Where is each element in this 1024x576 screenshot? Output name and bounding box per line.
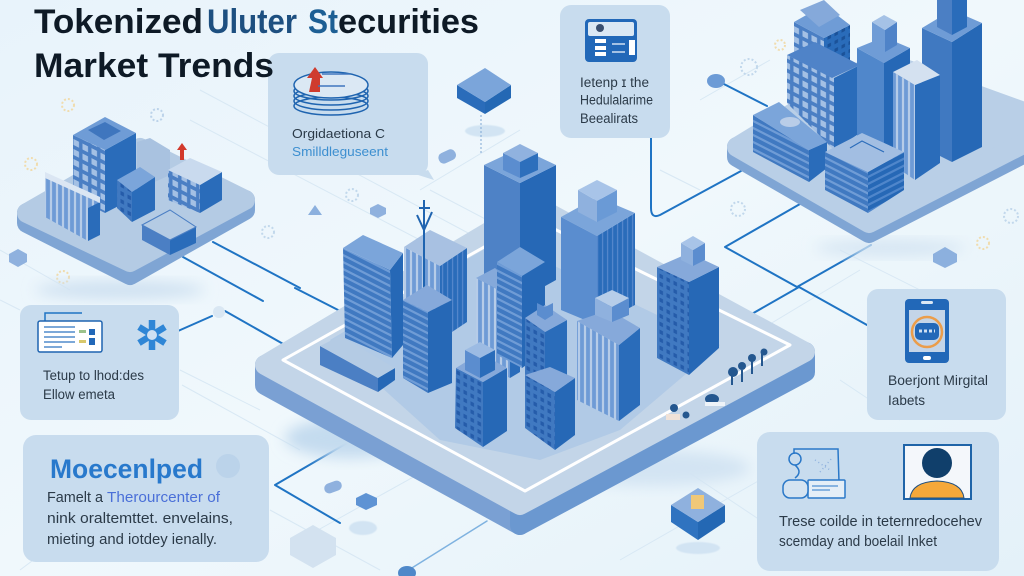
panel: top right of centre: Hedulalarime — [580, 92, 653, 108]
title: ecurities — [338, 3, 479, 41]
grey back block — [137, 138, 170, 190]
low building — [142, 210, 196, 255]
text: Famelt a — [47, 489, 104, 506]
panel: lower left: nink oraltemttet. envelains, — [47, 510, 233, 527]
title — [34, 3, 479, 85]
panel: lower left: mieting and iotdey ienally. — [47, 531, 217, 548]
mid building with small cube — [525, 303, 567, 390]
centre cluster buildings — [476, 247, 545, 378]
decorative snow flakes — [25, 40, 1018, 283]
panel: lower right: scemday and boelail Inket — [779, 534, 937, 550]
panel: top centre callout — [268, 53, 434, 180]
central platform — [265, 144, 805, 525]
heading: Moecenlped — [50, 454, 203, 484]
front centre building — [455, 342, 507, 447]
middle building — [117, 167, 155, 222]
tower with light windows — [787, 0, 860, 150]
title: St — [308, 3, 338, 41]
left platform — [27, 117, 245, 299]
icon: list card — [38, 313, 102, 352]
left tall building — [343, 235, 403, 358]
right back building — [561, 180, 635, 325]
title: Tokenized — [34, 3, 203, 41]
floating cube bottom — [671, 488, 725, 554]
floating cube top — [457, 68, 511, 155]
low roof building — [753, 102, 827, 182]
title: Uluter — [207, 3, 297, 41]
red-top building — [168, 143, 222, 213]
building with roof cube — [857, 15, 910, 160]
building base shadows — [330, 240, 720, 460]
small floating items — [9, 148, 957, 568]
icon: asterisk — [139, 320, 165, 350]
antenna building — [404, 200, 467, 340]
glass building with roof cube — [577, 290, 640, 421]
connector lines — [178, 80, 871, 571]
title: Market Trends — [34, 47, 274, 85]
panel: top right of centre: Beealirats — [580, 111, 638, 126]
striped tower — [893, 60, 940, 180]
panel: lower right — [757, 432, 999, 571]
panel: lower left — [23, 435, 269, 562]
icon: data card — [585, 19, 637, 62]
panel: right middle — [867, 289, 1006, 420]
text: Ietenp ɪ the — [580, 75, 649, 90]
tall corner tower — [922, 0, 982, 162]
text: Boerjont Mirgital — [888, 372, 988, 388]
right platform — [737, 0, 1024, 256]
front left building — [403, 285, 452, 393]
icon: portrait — [904, 445, 971, 499]
text: Trese coilde in teternredocehev — [779, 514, 983, 530]
back tall building — [484, 144, 556, 300]
icon: document with bag — [783, 449, 845, 498]
text: Orgidaetiona C — [292, 126, 385, 141]
panel: left middle — [20, 305, 179, 420]
panel: top centre callout: Smilldleguseent — [292, 144, 388, 159]
tower building — [73, 117, 136, 213]
icon: stacked discs with red arrow — [294, 67, 368, 115]
connector nodes — [213, 74, 725, 576]
people and trees on platform — [666, 348, 768, 420]
icon: faint flake — [216, 454, 240, 478]
low left building — [320, 336, 395, 392]
gate building — [45, 172, 100, 241]
panel: left middle: Ellow emeta — [43, 387, 115, 402]
front low building — [825, 133, 904, 213]
right tower — [657, 236, 719, 375]
panel: top right of centre — [560, 5, 670, 138]
text: Tetup to lhod:des — [43, 368, 144, 383]
panel: lower left: Therourcenter of — [107, 489, 221, 506]
icon: phone — [905, 299, 949, 363]
panel: right middle: Iabets — [888, 392, 925, 408]
front right building — [525, 367, 575, 450]
